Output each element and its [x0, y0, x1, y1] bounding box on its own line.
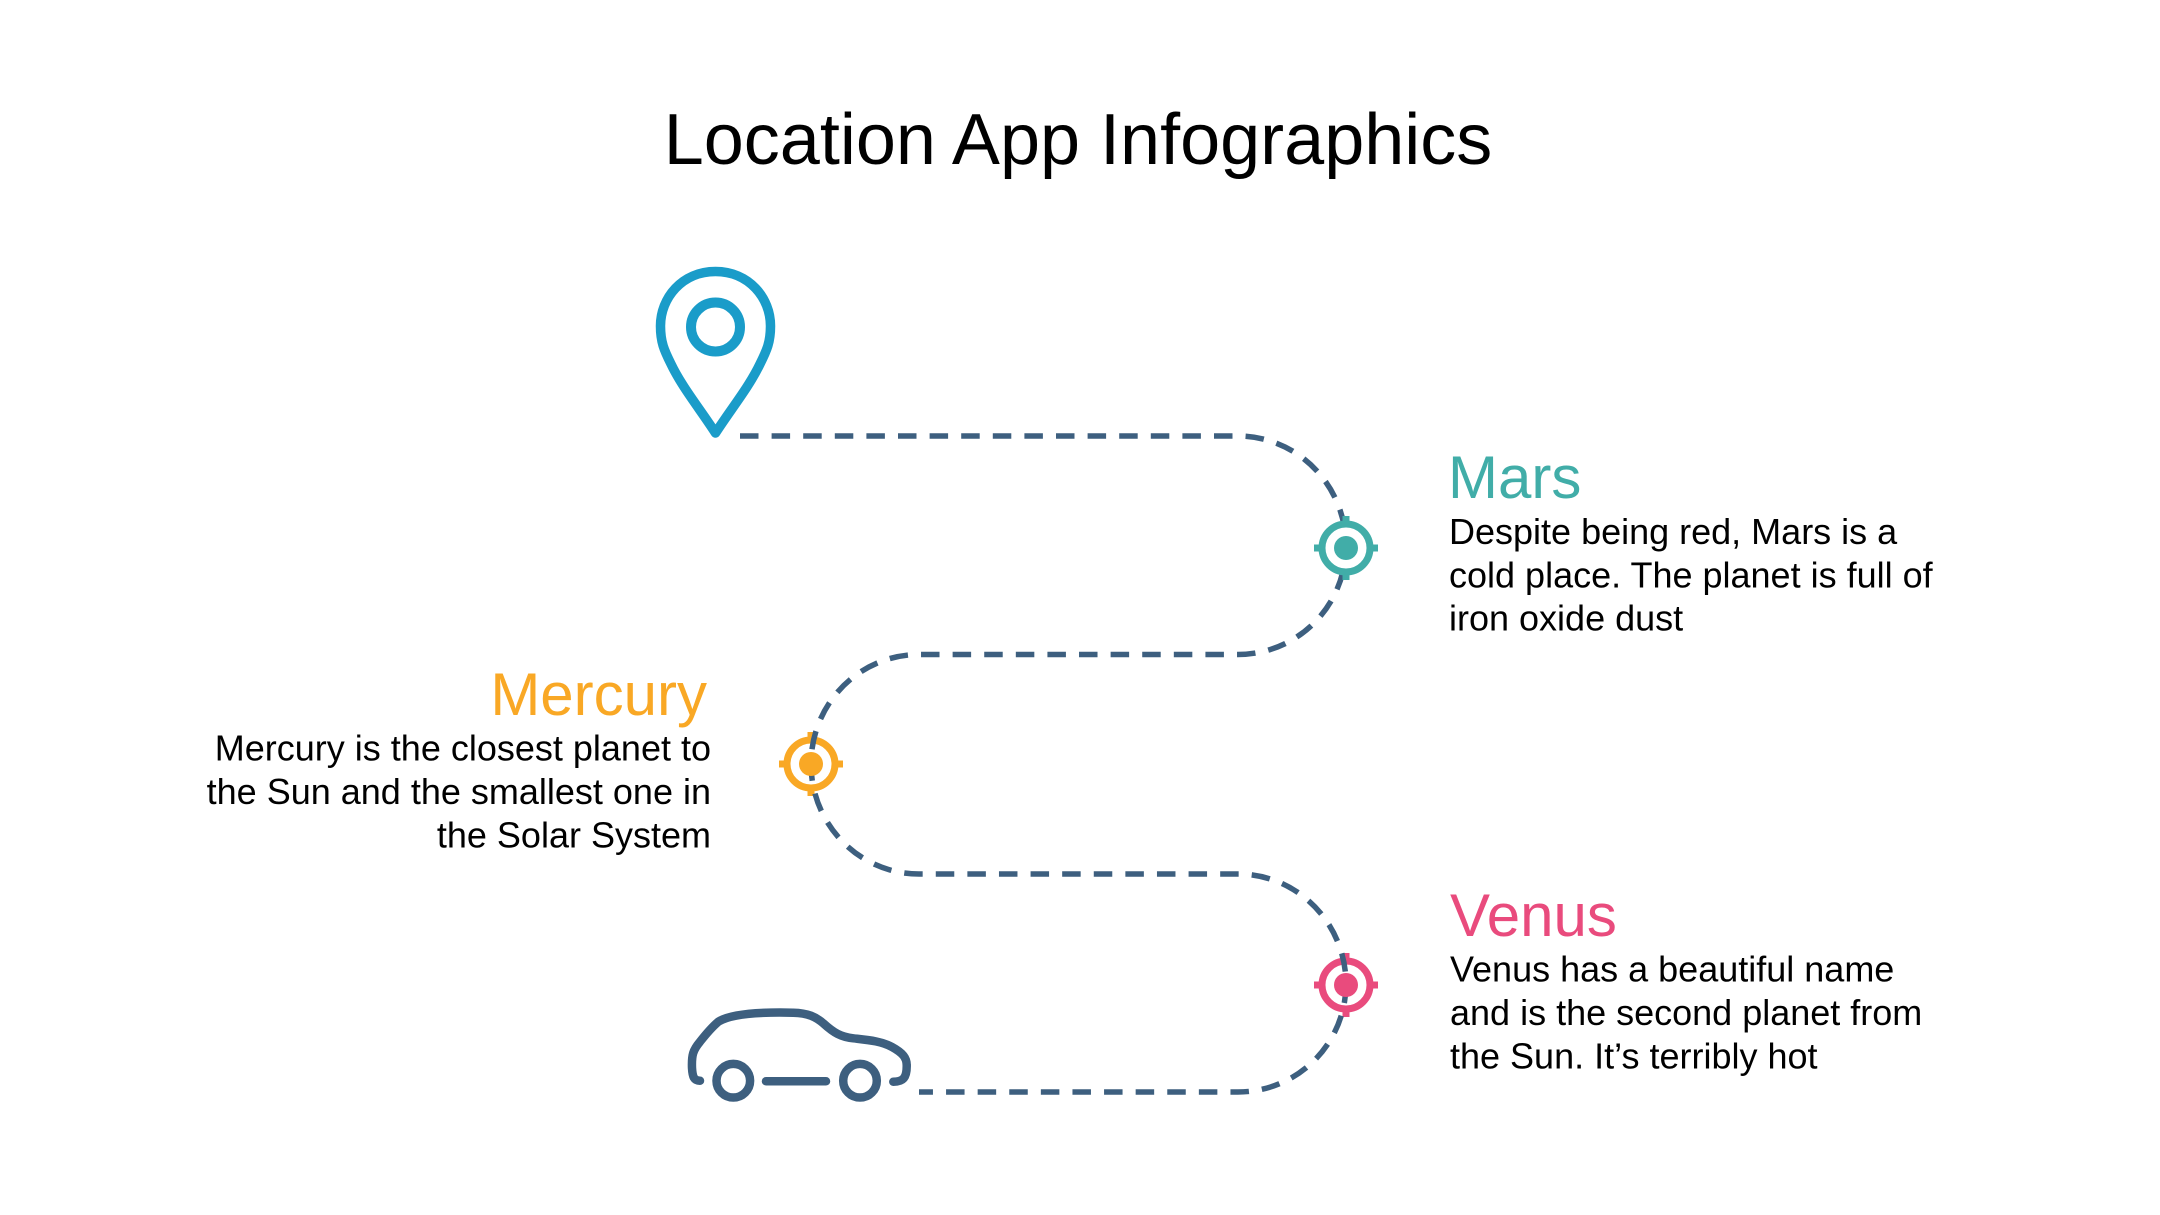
text: Venus: Venus has a beautiful name: [1450, 949, 1894, 990]
text: Mars: cold place. The planet is full of: [1449, 554, 1934, 595]
icon: target Venus ring: [1314, 953, 1378, 1017]
text: Mars: Mars: [1448, 444, 1581, 511]
icon: car: [692, 1013, 907, 1097]
icon: location pin: [660, 272, 770, 433]
icon: target Mars: [1314, 516, 1378, 580]
text: Mars: Despite being red, Mars is a: [1449, 511, 1898, 552]
text: Venus: the Sun. It’s terribly hot: [1450, 1035, 1818, 1076]
text: Venus: Venus: [1450, 882, 1617, 949]
text: Mars: [1448, 444, 1934, 639]
text: Venus: [1450, 882, 1922, 1076]
text: Mercury: [207, 661, 711, 855]
icon: target Mercury ring: [779, 732, 843, 796]
text: Venus: and is the second planet from: [1450, 992, 1922, 1033]
text: Mercury: the Solar System: [437, 814, 711, 855]
dashed route: [740, 436, 1346, 1092]
text: Mars: iron oxide dust: [1449, 598, 1683, 639]
text: Mercury: Mercury is the closest planet to: [215, 728, 711, 769]
icon: target Venus dot: [1334, 973, 1358, 997]
title: Location App Infographics: [664, 100, 1492, 180]
icon: target Mercury dot: [799, 752, 823, 776]
text: Mercury: Mercury: [490, 661, 707, 728]
text: Mercury: the Sun and the smallest one in: [207, 771, 711, 812]
